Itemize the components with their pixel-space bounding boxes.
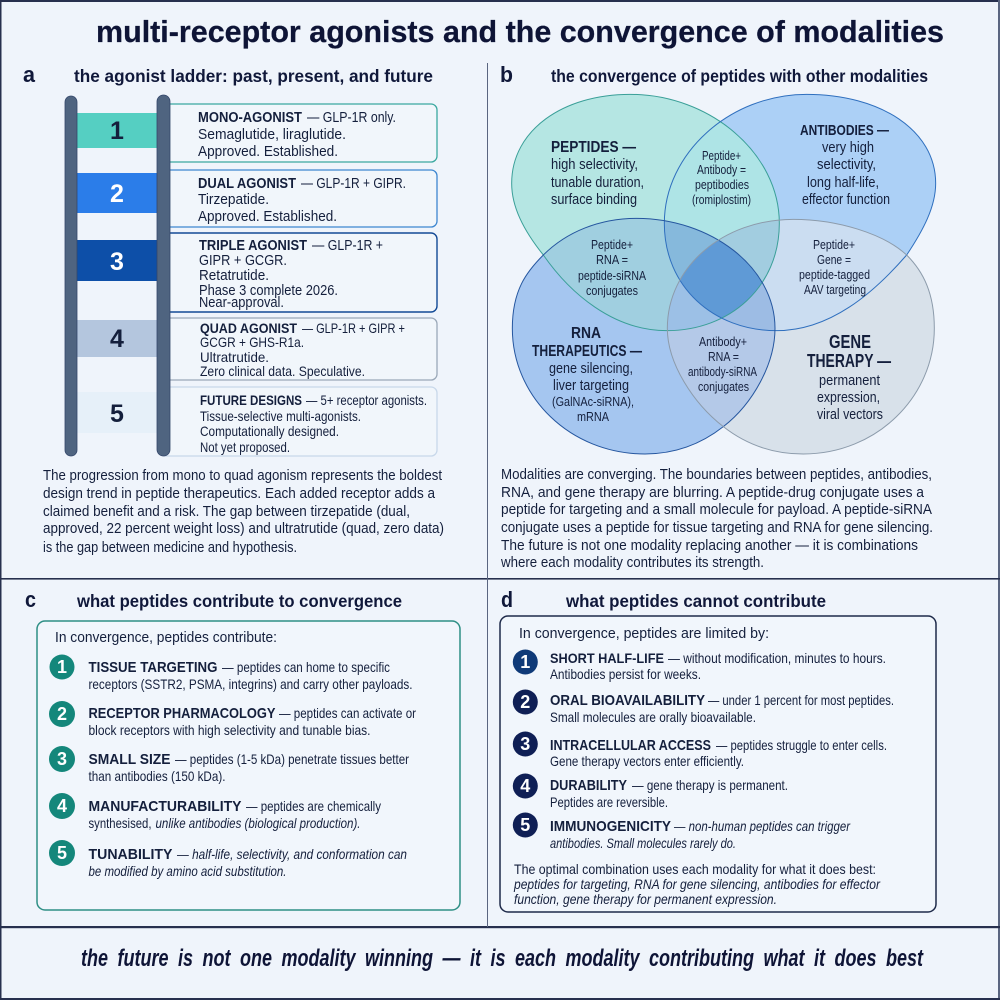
label: rna therapeutics: RNA — [571, 325, 601, 342]
list box c: In convergence, peptides contribute: — [55, 629, 277, 646]
item c3: SMALL SIZE — [88, 751, 170, 768]
label: antibody + rna: antibody-siRNA — [688, 364, 757, 379]
box 4: quad agonist: Ultratrutide. — [200, 349, 269, 365]
label: antibody + rna — [688, 334, 757, 394]
label: peptide + gene: AAV targeting — [804, 282, 866, 297]
item c1: receptors (SSTR2, PSMA, integrins) and carry other payloads. — [88, 676, 412, 692]
label: peptide + gene: Peptide+ — [813, 237, 855, 252]
label: peptides: surface binding — [551, 191, 637, 208]
item c4: — peptides are chemically — [246, 798, 381, 814]
text block b: peptide for targeting and a small molecule for payload. A peptide-siRNA — [501, 501, 932, 518]
item c3 — [49, 746, 409, 784]
label: peptide + antibody — [692, 148, 751, 207]
rung 4 — [77, 320, 157, 357]
item c2: block receptors with high selectivity and tunable bias. — [88, 722, 370, 738]
box 5: future designs — [160, 387, 437, 456]
panel letter b: b — [500, 62, 513, 87]
label: antibody + rna: conjugates — [698, 379, 749, 394]
item c5: be modified by amino acid substitution. — [88, 863, 286, 879]
closing note d: peptides for targeting, RNA for gene silencing, antibodies for effector — [513, 876, 881, 892]
text block a: claimed benefit and a risk. The gap between tirzepatide (dual, — [43, 503, 410, 520]
panel c: what peptides contribute — [25, 587, 460, 910]
closing note d: function, gene therapy for permanent expression. — [514, 891, 777, 907]
item c2 — [49, 701, 416, 738]
box 4: quad agonist: GCGR + GHS-R1a. — [200, 334, 304, 350]
item d3: INTRACELLULAR ACCESS — [550, 737, 711, 754]
box 3: triple agonist: — GLP-1R + — [312, 238, 383, 254]
box 3: triple agonist: Retatrutide. — [199, 268, 269, 284]
item d2: 2 — [520, 692, 530, 712]
item d3 — [513, 732, 887, 769]
item d5 — [513, 812, 851, 851]
label: rna therapeutics: (GalNAc-siRNA), — [552, 394, 634, 409]
item d1: Antibodies persist for weeks. — [550, 666, 701, 682]
list box c — [37, 621, 460, 910]
panel letter a: a — [23, 62, 36, 87]
box 5: future designs: Computationally designed. — [200, 423, 339, 439]
box 3: triple agonist: Near-approval. — [199, 295, 284, 311]
item c4 — [49, 793, 381, 831]
box 5: future designs: Not yet proposed. — [200, 439, 290, 455]
box 3: triple agonist: Phase 3 complete 2026. — [199, 283, 338, 299]
label: peptide + antibody: peptibodies — [695, 177, 749, 192]
item c2: 2 — [57, 704, 67, 724]
label: peptide + rna: RNA = — [596, 252, 628, 267]
label: antibodies — [800, 122, 890, 208]
label: peptide + antibody: (romiplostim) — [692, 192, 751, 207]
label: rna therapeutics — [532, 325, 642, 424]
item d3: 3 — [520, 734, 530, 754]
item c5: — half-life, selectivity, and conformation can — [176, 846, 407, 862]
box 2: dual agonist: Approved. Established. — [198, 209, 337, 225]
box 1: mono-agonist: — GLP-1R only. — [307, 110, 396, 126]
text block a: design trend in peptide therapeutics. Each added receptor adds a — [43, 485, 436, 502]
box 5: future designs: — 5+ receptor agonists. — [306, 392, 427, 408]
item d3: — peptides struggle to enter cells. — [716, 737, 887, 753]
label: gene therapy: THERAPY — — [807, 351, 891, 371]
rung 4: 4 — [110, 325, 124, 353]
label: peptide + gene — [799, 237, 870, 297]
label: gene therapy: expression, — [817, 389, 880, 406]
item c3: than antibodies (150 kDa). — [88, 768, 226, 784]
item d4: — gene therapy is permanent. — [632, 777, 788, 793]
box 1: mono-agonist: Approved. Established. — [198, 144, 338, 160]
item c3: 3 — [57, 749, 67, 769]
list box d — [500, 616, 936, 912]
heading a: the agonist ladder: past, present, and future — [74, 66, 433, 86]
label: gene therapy: permanent — [819, 372, 881, 389]
heading d: what peptides cannot contribute — [565, 591, 826, 611]
box 5: future designs: Tissue-selective multi-agonists. — [200, 408, 361, 424]
label: rna therapeutics: gene silencing, — [549, 360, 633, 377]
label: peptide + antibody: Antibody = — [697, 162, 746, 177]
label: antibodies: long half-life, — [807, 174, 879, 191]
panel letter d: d — [501, 587, 513, 612]
item d2: Small molecules are orally bioavailable. — [550, 709, 756, 725]
list box d: In convergence, peptides are limited by: — [519, 625, 769, 642]
title: multi-receptor agonists and the convergence of modalities — [96, 14, 944, 49]
left rail — [65, 96, 77, 456]
box 4: quad agonist: Zero clinical data. Speculative. — [200, 363, 365, 379]
text block b: RNA, and gene therapy are blurring. A peptide-drug conjugate uses a — [501, 484, 925, 501]
box 4: quad agonist — [160, 318, 437, 380]
rung 3 — [77, 240, 157, 281]
label: antibodies: selectivity, — [817, 156, 876, 173]
item d5: antibodies. Small molecules rarely do. — [550, 835, 736, 851]
label: rna therapeutics: liver targeting — [553, 377, 629, 394]
rung 5 — [77, 392, 157, 433]
rung 2 — [77, 173, 157, 213]
box 4: quad agonist: — GLP-1R + GIPR + — [302, 320, 405, 336]
box 2: dual agonist: DUAL AGONIST — [198, 176, 296, 192]
label: peptide + gene: Gene = — [817, 252, 851, 267]
heading c: what peptides contribute to convergence — [76, 591, 402, 611]
item d1: 1 — [520, 652, 530, 672]
rung 1: 1 — [110, 117, 124, 145]
rung 1 — [77, 113, 157, 148]
panel b: convergence venn — [500, 62, 936, 571]
label: peptide + rna: Peptide+ — [591, 237, 633, 252]
panel d: what peptides cannot contribute — [500, 587, 936, 912]
item c5: 5 — [57, 843, 67, 863]
label: peptide + rna — [578, 237, 646, 298]
item c2: — peptides can activate or — [279, 705, 416, 721]
item c3: — peptides (1-5 kDa) penetrate tissues better — [175, 751, 409, 767]
item d5: 5 — [520, 815, 530, 835]
label: peptides: PEPTIDES — — [551, 139, 636, 156]
text block a: The progression from mono to quad agonism represents the boldest — [43, 467, 443, 484]
label: antibody + rna: Antibody+ — [699, 334, 747, 349]
item c2: RECEPTOR PHARMACOLOGY — [88, 705, 276, 722]
text block a — [43, 467, 444, 556]
item d5: IMMUNOGENICITY — [550, 818, 671, 835]
box 3: triple agonist: TRIPLE AGONIST — [199, 238, 307, 254]
box 1: mono-agonist — [160, 104, 437, 162]
label: rna therapeutics: mRNA — [577, 409, 609, 424]
label: peptide + rna: conjugates — [586, 283, 638, 298]
item d1: SHORT HALF-LIFE — [550, 650, 664, 666]
label: antibodies: ANTIBODIES — — [800, 122, 889, 139]
label: rna therapeutics: THERAPEUTICS — — [532, 343, 642, 360]
item c1: 1 — [57, 657, 67, 677]
venn diagram — [512, 94, 936, 454]
box 1: mono-agonist: MONO-AGONIST — [198, 110, 302, 126]
item d2: ORAL BIOAVAILABILITY — [550, 692, 705, 709]
panel letter c: c — [25, 587, 36, 612]
text block b: The future is not one modality replacing another — it is combinations — [501, 537, 918, 554]
label: antibodies: very high — [822, 139, 874, 156]
box 1: mono-agonist: Semaglutide, liraglutide. — [198, 127, 346, 143]
box 3: triple agonist — [160, 233, 437, 312]
box 2: dual agonist — [160, 170, 437, 227]
right rail — [157, 95, 170, 456]
item d2 — [513, 690, 894, 725]
label: antibodies: effector function — [802, 191, 890, 208]
text block b: where each modality contributes its strength. — [500, 554, 764, 571]
label: antibody + rna: RNA = — [708, 349, 739, 364]
label: peptide + rna: peptide-siRNA — [578, 268, 646, 283]
rung 5: 5 — [110, 400, 124, 428]
item d1 — [513, 650, 886, 682]
closing note d: The optimal combination uses each modality for what it does best: — [514, 861, 876, 877]
label: peptides: high selectivity, — [551, 156, 638, 173]
box 2: dual agonist: Tirzepatide. — [198, 192, 269, 208]
text block a: is the gap between medicine and hypothesis. — [43, 539, 297, 556]
label: peptide + gene: peptide-tagged — [799, 267, 870, 282]
item d2: — under 1 percent for most peptides. — [708, 692, 894, 708]
box 5: future designs: FUTURE DESIGNS — [200, 392, 302, 408]
item c1: TISSUE TARGETING — [88, 659, 218, 676]
item c5: TUNABILITY — [88, 846, 172, 863]
box 2: dual agonist: — GLP-1R + GIPR. — [301, 176, 406, 192]
text block b: Modalities are converging. The boundaries between peptides, antibodies, — [501, 466, 932, 483]
item c4: 4 — [57, 796, 67, 816]
label: gene therapy — [807, 332, 891, 423]
panel a: agonist ladder — [23, 62, 444, 556]
item c4: unlike antibodies (biological production). — [156, 815, 360, 831]
text block b: conjugate uses a peptide for tissue targeting and RNA for gene silencing. — [501, 519, 933, 536]
label: gene therapy: viral vectors — [817, 406, 883, 423]
label: peptide + antibody: Peptide+ — [702, 148, 741, 163]
item d4 — [513, 774, 788, 810]
text block a: approved, 22 percent weight loss) and ultratrutide (quad, zero data) — [43, 520, 444, 537]
item c1 — [50, 654, 412, 692]
item d3: Gene therapy vectors enter efficiently. — [550, 753, 744, 769]
box 3: triple agonist: GIPR + GCGR. — [199, 253, 287, 269]
item d5: — non-human peptides can trigger — [673, 818, 851, 834]
text block b — [500, 466, 933, 571]
item c4: synthesised, — [88, 815, 152, 831]
item c4: MANUFACTURABILITY — [88, 798, 242, 815]
ladder — [65, 95, 437, 456]
item d4: 4 — [520, 776, 530, 796]
closing note d — [513, 861, 881, 907]
box 4: quad agonist: QUAD AGONIST — [200, 320, 297, 336]
venn shapes — [512, 94, 936, 454]
rung 3: 3 — [110, 248, 124, 276]
label: gene therapy: GENE — [829, 332, 871, 352]
item c1: — peptides can home to specific — [222, 659, 390, 675]
heading b: the convergence of peptides with other modalities — [551, 66, 928, 86]
rung 2: 2 — [110, 180, 124, 208]
item d1: — without modification, minutes to hours. — [668, 650, 886, 666]
label: peptides: tunable duration, — [551, 174, 644, 191]
item d4: DURABILITY — [550, 777, 627, 794]
item d4: Peptides are reversible. — [550, 794, 668, 810]
label: peptides — [551, 139, 644, 208]
item c5 — [49, 840, 407, 879]
